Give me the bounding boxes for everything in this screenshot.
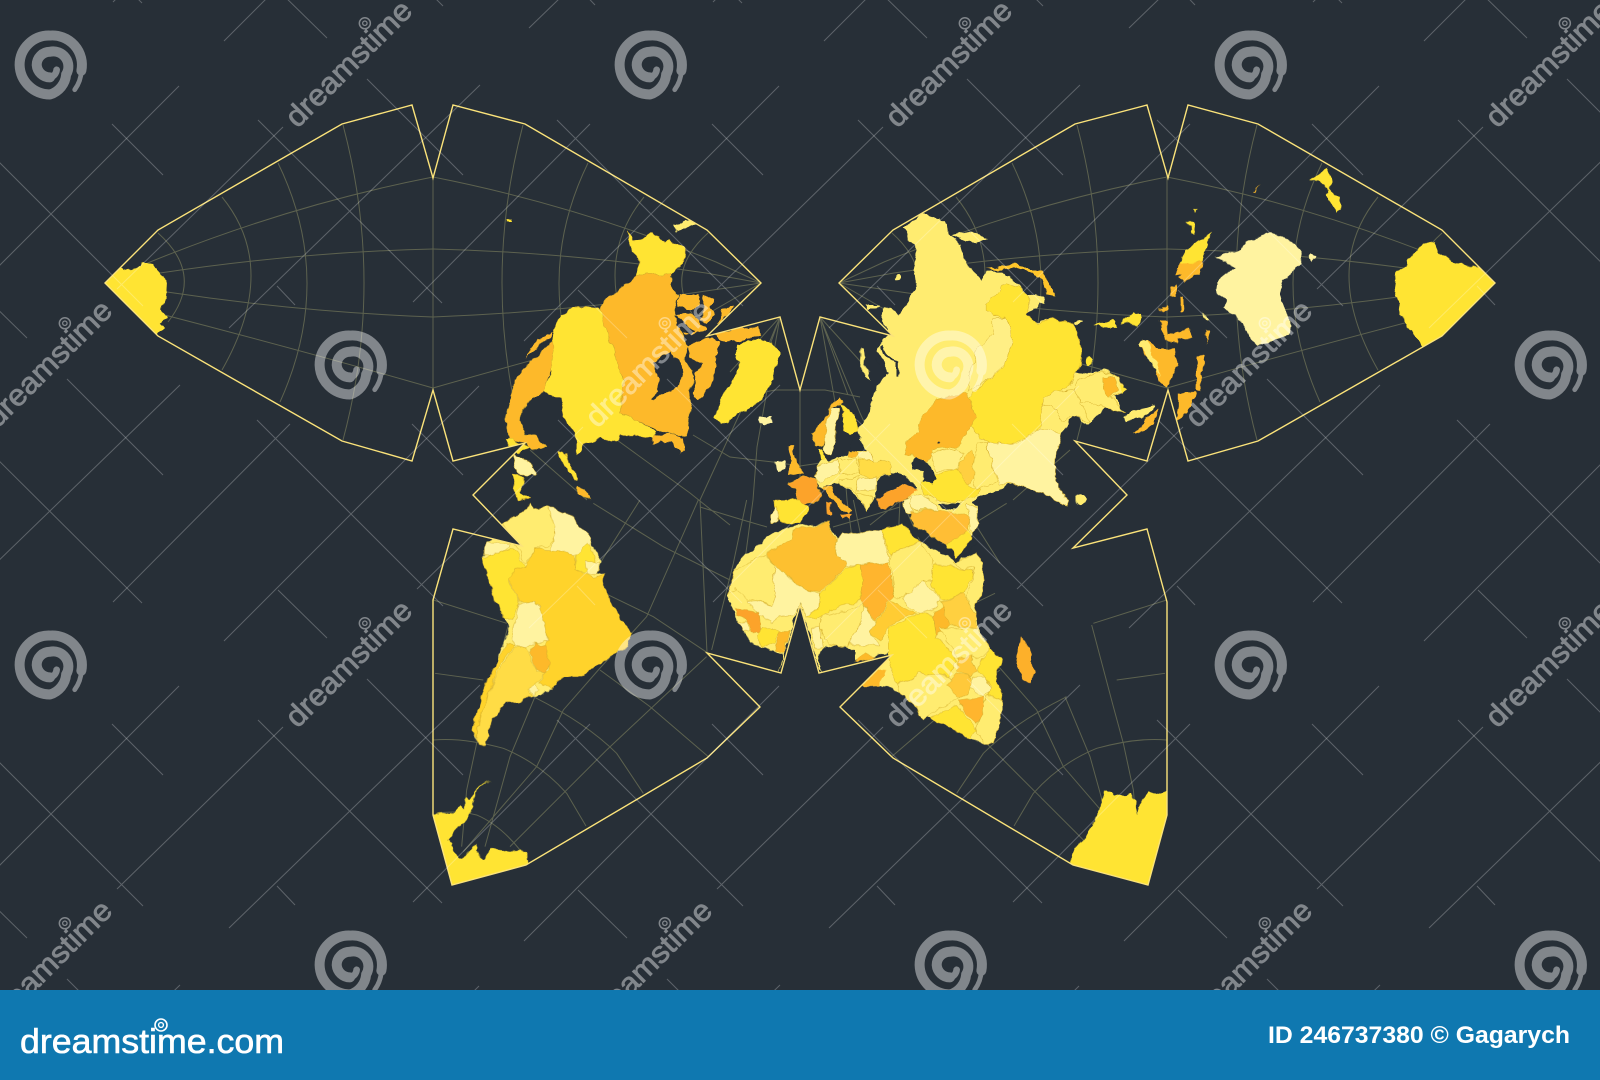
country: Cameroon — [848, 607, 880, 647]
country: Denmark — [819, 450, 826, 460]
country: Peru — [482, 548, 527, 620]
watermark text: dreamstime — [1179, 294, 1319, 434]
country: Sweden — [825, 408, 840, 455]
country: Sudan — [890, 542, 932, 600]
country: central orange — [903, 393, 975, 463]
footer logo text: dreamstime.com — [20, 1023, 284, 1061]
New Zealand — [1310, 168, 1342, 213]
Antarctic-side yellow block — [1395, 242, 1503, 353]
country: central asia group — [930, 448, 963, 470]
country: Uganda — [933, 607, 950, 635]
country: Argentina — [477, 647, 545, 745]
country: Spain — [773, 500, 810, 523]
archipelago: upper yellow section — [1180, 232, 1212, 263]
country: Italy — [822, 487, 852, 515]
region: large orange territory — [600, 274, 693, 437]
country: Ecuador — [485, 542, 510, 557]
butterfly projection outline — [105, 105, 1495, 885]
region: western orange territory — [506, 340, 554, 448]
sea: Baltic — [823, 417, 857, 462]
country: Somalia — [953, 553, 983, 613]
country: Oman region pale — [967, 503, 978, 533]
country: Ethiopia — [942, 593, 977, 628]
land: Eurasia — [857, 213, 1178, 540]
region: Greenland — [715, 340, 782, 425]
footer logo swirl — [155, 1019, 167, 1031]
country: Mauritania — [728, 555, 774, 605]
country: Uruguay — [527, 680, 540, 695]
country: Chad — [860, 563, 893, 622]
land: Europe — [770, 397, 917, 523]
country: pale eastern territory — [968, 317, 1013, 392]
land: North America — [505, 219, 782, 500]
country: Guyana — [575, 543, 595, 572]
land: left edge fragment — [106, 262, 168, 334]
marker: capital dot — [937, 441, 940, 444]
country: Bolivia — [513, 602, 548, 648]
country: Angola — [863, 668, 885, 687]
country: Benin — [812, 627, 823, 647]
country: Botswana — [947, 673, 972, 697]
land: Africa and Arabia — [728, 510, 1033, 745]
archipelago: orange section — [1175, 262, 1203, 282]
country: southern yellow — [930, 705, 977, 738]
country: Zambia — [897, 672, 960, 720]
region: Hudson-like bay — [650, 352, 685, 400]
country: indochina group — [1043, 390, 1090, 423]
country: Niger — [807, 565, 863, 620]
region: caribbean islands — [557, 452, 578, 480]
country: Ghana — [775, 630, 790, 652]
country: Finland — [840, 402, 858, 438]
country: Paraguay — [530, 643, 548, 673]
country: Venezuela — [548, 506, 592, 558]
base south america — [473, 502, 632, 745]
image credit: ID 246737380 © Gagarych — [1268, 1022, 1570, 1049]
footer banner — [0, 990, 1600, 1080]
small islands — [1308, 253, 1317, 262]
island: Madagascar — [1015, 637, 1033, 682]
country: Gabon — [855, 653, 875, 662]
country: large bright yellow — [968, 283, 1082, 445]
arctic seas — [880, 347, 897, 377]
country: Colombia — [503, 502, 555, 563]
country: Ivory Coast — [757, 627, 780, 647]
region: arctic islands — [653, 295, 760, 453]
base africa — [728, 522, 1003, 745]
country: Ireland — [775, 459, 785, 471]
sea: Caspian — [912, 457, 937, 483]
country: Levant — [903, 497, 913, 515]
country: Turkey — [877, 483, 917, 508]
country: lower orange — [958, 697, 985, 723]
region: central america — [505, 438, 530, 453]
continent: Antarctica left fragment — [427, 779, 530, 893]
country: Suriname — [585, 562, 600, 573]
islands — [861, 232, 1178, 506]
country: South Sudan — [903, 580, 942, 613]
country: Norway — [812, 397, 843, 447]
base asia — [857, 213, 1125, 540]
central europe group — [848, 450, 860, 458]
sea: Red Sea — [902, 523, 980, 563]
country: Nigeria — [820, 603, 865, 647]
land: Oceania — [1120, 168, 1503, 422]
country: Congo — [888, 613, 957, 683]
country: Kenya — [940, 628, 990, 658]
country: Guinea — [735, 608, 760, 633]
country: Zimbabwe — [970, 677, 992, 697]
country: Mozambique — [977, 647, 1003, 700]
land masses clipped to projection wings — [92, 168, 1503, 893]
country: France — [787, 475, 822, 503]
country: Egypt — [882, 523, 920, 555]
watermark text: dreamstime — [879, 594, 1019, 734]
country: Saudi Arabia — [910, 510, 970, 547]
land: South America and Antarctic peninsula — [427, 502, 632, 893]
country: Portugal — [770, 505, 778, 522]
country: Libya — [835, 528, 890, 567]
country: south east tip — [977, 697, 1003, 745]
watermark text: dreamstime — [279, 594, 419, 734]
sea: Persian gulf — [938, 498, 964, 510]
country: UK — [788, 447, 805, 475]
watermark text: dreamstime — [879, 0, 1019, 134]
base europe — [813, 450, 892, 512]
watermark text: dreamstime — [579, 894, 719, 1034]
pale Australia — [1213, 233, 1302, 345]
country: Yemen — [947, 530, 972, 558]
country: Mali — [747, 567, 819, 623]
country: pale south asia — [987, 428, 1068, 507]
watermark text: dreamstime — [279, 0, 419, 134]
country: Chile — [473, 643, 515, 738]
region: Iceland — [758, 416, 772, 426]
region: northern peninsula — [629, 232, 687, 274]
graticule grid — [105, 125, 1495, 852]
country: Brazil — [508, 548, 632, 688]
country: northeast yellow — [932, 565, 973, 600]
country: Sierra Leone — [738, 622, 750, 632]
land: Antarctica right fragment — [1068, 790, 1173, 892]
region: bright yellow territory — [543, 307, 657, 455]
sea: Black sea — [888, 476, 896, 490]
watermark text: dreamstime — [1179, 894, 1319, 1034]
country: Algeria — [767, 522, 847, 592]
watermark text: dreamstime — [579, 294, 719, 434]
country: Turkey region pale — [907, 493, 937, 510]
country: Central African Republic — [870, 600, 917, 640]
